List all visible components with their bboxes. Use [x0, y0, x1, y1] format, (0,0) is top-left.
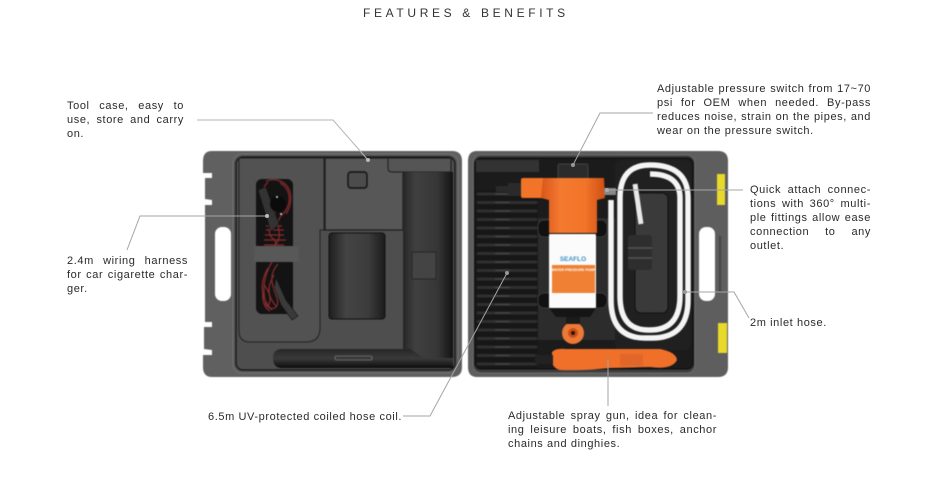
bottom slot	[273, 349, 453, 368]
lower middle panel	[321, 234, 403, 348]
spray gun	[535, 349, 677, 370]
text: quick attach: connection to any	[750, 226, 871, 238]
inlet hose loop	[611, 165, 688, 338]
title: FEATURES & BENEFITS	[363, 6, 569, 20]
text: pressure switch: wear on the pressure switch.	[657, 125, 814, 137]
coiled hose	[476, 190, 538, 368]
text: pressure switch: psi for OEM when needed. By-pass	[657, 97, 871, 109]
case shell	[203, 151, 462, 377]
leader: spray gun	[606, 356, 610, 406]
text: tool case: use, store and carry	[67, 114, 184, 126]
text: spray gun: Adjustable spray gun, idea for clean-	[508, 410, 717, 422]
handle opening	[699, 227, 715, 301]
hose filter	[628, 235, 652, 270]
panel: left case half	[203, 151, 462, 377]
pump base	[549, 308, 596, 317]
wiring harness recess	[256, 179, 298, 320]
text: tool case: on.	[67, 128, 84, 140]
block with square recess	[325, 158, 403, 230]
text: tool case: Tool case, easy to	[67, 100, 184, 112]
text: wiring harness: for car cigarette char-	[67, 269, 188, 281]
text: spray gun: chains and dinghies.	[508, 438, 620, 450]
panel: right case half	[468, 151, 728, 377]
yellow latch bottom	[718, 323, 727, 353]
text: wiring harness: 2.4m wiring harness	[67, 255, 188, 267]
text: quick attach: outlet.	[750, 240, 784, 252]
tray rim	[233, 154, 458, 373]
top-right tab	[388, 158, 451, 172]
outlet fitting	[604, 188, 616, 195]
orange label	[552, 265, 595, 293]
pump mounting feet	[538, 220, 607, 308]
clip	[274, 278, 298, 320]
pump: WATER PRESSURE PUMP	[552, 268, 596, 272]
middle cylinder recess	[329, 233, 385, 319]
text: inlet hose: 2m inlet hose.	[750, 317, 827, 329]
white body	[549, 234, 596, 308]
orange head	[541, 178, 605, 233]
tray ledges	[476, 160, 539, 172]
text: hose coil: 6.5m UV-protected coiled hose coil.	[208, 411, 402, 423]
handle opening	[215, 227, 231, 301]
text: pressure switch: reduces noise, strain on the pipes, and	[657, 111, 871, 123]
raised tray panel	[239, 158, 324, 342]
leader: pressure switch	[571, 113, 653, 167]
handle groove	[719, 236, 721, 292]
strap	[254, 246, 299, 262]
text: quick attach: ple fittings allow ease	[750, 212, 871, 224]
text: pressure switch	[657, 83, 871, 137]
orange nozzle	[562, 322, 584, 344]
red wires	[262, 180, 291, 311]
text: spray gun: ing leisure boats, fish boxes, anchor	[508, 424, 717, 436]
text: quick attach	[750, 184, 871, 252]
text: quick attach: tions with 360° multi-	[750, 198, 871, 210]
text: wiring harness	[67, 255, 188, 295]
leader: tool case	[197, 120, 370, 162]
yellow latch top	[717, 174, 725, 205]
brand: SEAFLO	[560, 256, 586, 263]
pressure switch	[558, 164, 588, 180]
leader: hose coil	[403, 271, 509, 416]
tall cylinder recess	[403, 172, 453, 358]
case shell	[468, 151, 728, 377]
text: pressure switch: Adjustable pressure switch from 17~70	[657, 83, 871, 95]
leader: inlet hose	[683, 290, 749, 318]
tray	[473, 155, 695, 373]
leader: wiring harness	[127, 214, 269, 250]
pump	[496, 178, 616, 344]
inlet fitting	[496, 183, 521, 196]
text: quick attach: Quick attach connec-	[750, 184, 871, 196]
text: spray gun	[508, 410, 717, 450]
cigarette plug	[258, 187, 279, 232]
text: tool case	[67, 100, 184, 140]
leader: quick attach	[605, 188, 743, 192]
text: wiring harness: ger.	[67, 283, 88, 295]
